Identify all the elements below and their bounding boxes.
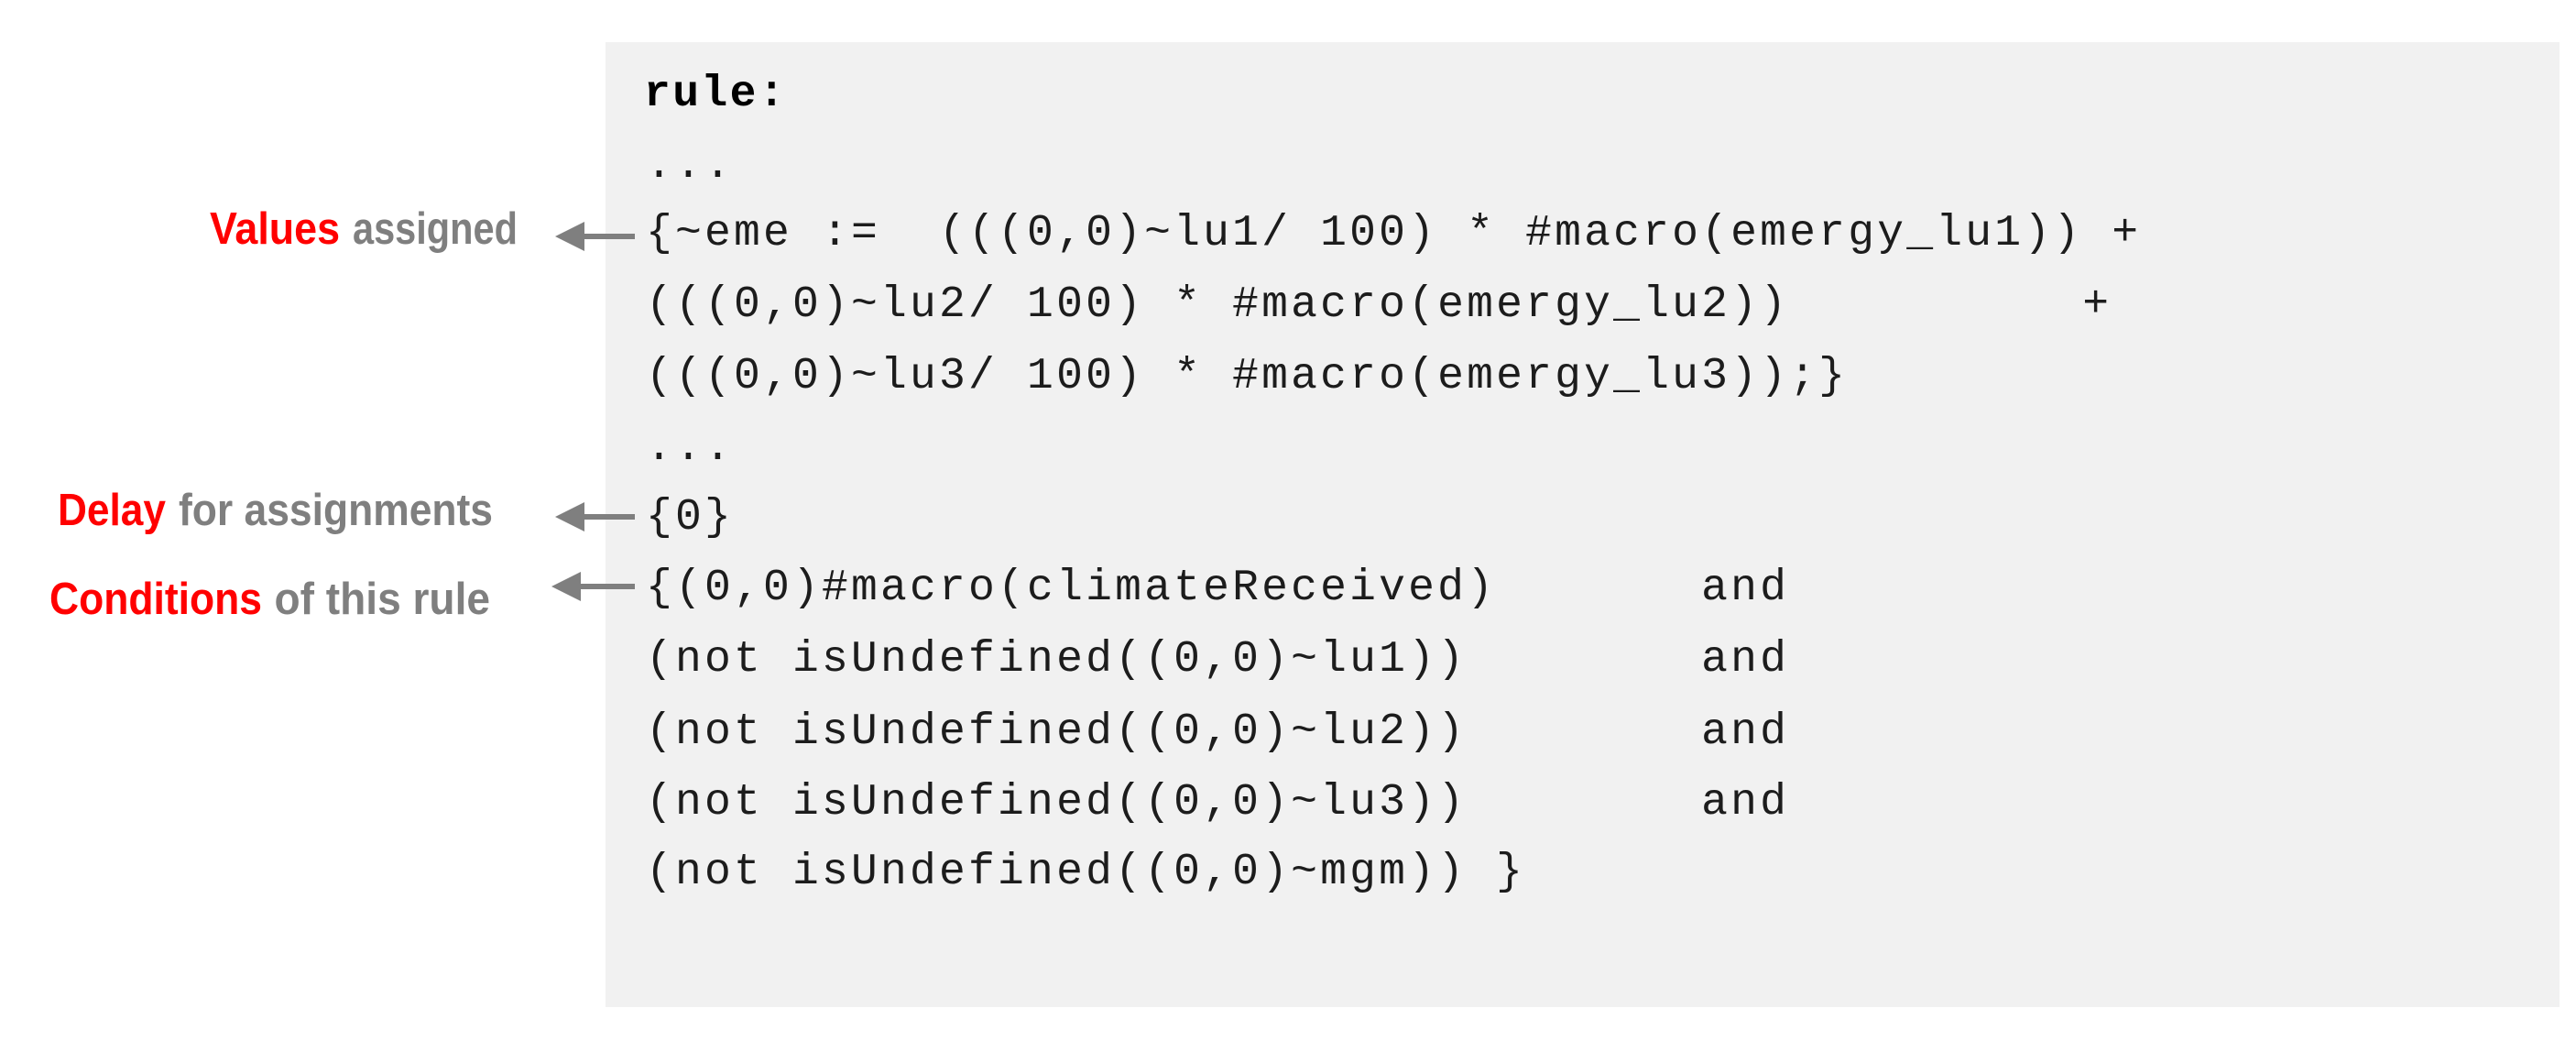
code block: rule bbox=[644, 70, 2141, 897]
arrow: values assigned bbox=[555, 222, 635, 251]
code line: assignment 1: {~eme := (((0,0)~lu1/ 100) * #macro(emergy_lu1)) + bbox=[646, 209, 2141, 258]
code line: condition 1: {(0,0)#macro(climateReceived) and bbox=[646, 564, 1789, 613]
label: conditions of this rule: of this rule bbox=[275, 575, 490, 624]
code line: condition 2: (not isUndefined((0,0)~lu1)) and bbox=[646, 635, 1789, 685]
code line: condition 5: (not isUndefined((0,0)~mgm)) } bbox=[646, 848, 1525, 897]
code line: delay: {0} bbox=[646, 493, 734, 542]
code line: ellipsis: ... bbox=[646, 423, 734, 473]
label: conditions of this rule: Conditions bbox=[49, 575, 262, 624]
code line: condition 3: (not isUndefined((0,0)~lu2)) and bbox=[646, 707, 1789, 757]
label: conditions of this rule bbox=[49, 575, 490, 624]
arrow: conditions of this rule bbox=[551, 572, 635, 601]
code line: assignment 3: (((0,0)~lu3/ 100) * #macro(emergy_lu3));} bbox=[646, 352, 1848, 401]
arrow: delay for assignments bbox=[555, 502, 635, 531]
code line: condition 4: (not isUndefined((0,0)~lu3)) and bbox=[646, 778, 1789, 827]
label: values assigned: Values bbox=[210, 204, 340, 254]
label: values assigned: assigned bbox=[353, 204, 518, 254]
code line: ellipsis: ... bbox=[646, 141, 734, 191]
code line: assignment 2: (((0,0)~lu2/ 100) * #macro(emergy_lu2)) + bbox=[646, 280, 2112, 330]
panel: code background bbox=[606, 42, 2560, 1007]
label: values assigned bbox=[210, 204, 518, 254]
label: delay for assignments: for assignments bbox=[179, 486, 493, 535]
label: delay for assignments bbox=[58, 486, 493, 535]
label: delay for assignments: Delay bbox=[58, 486, 166, 535]
code line: rule heading: rule: bbox=[644, 70, 787, 119]
